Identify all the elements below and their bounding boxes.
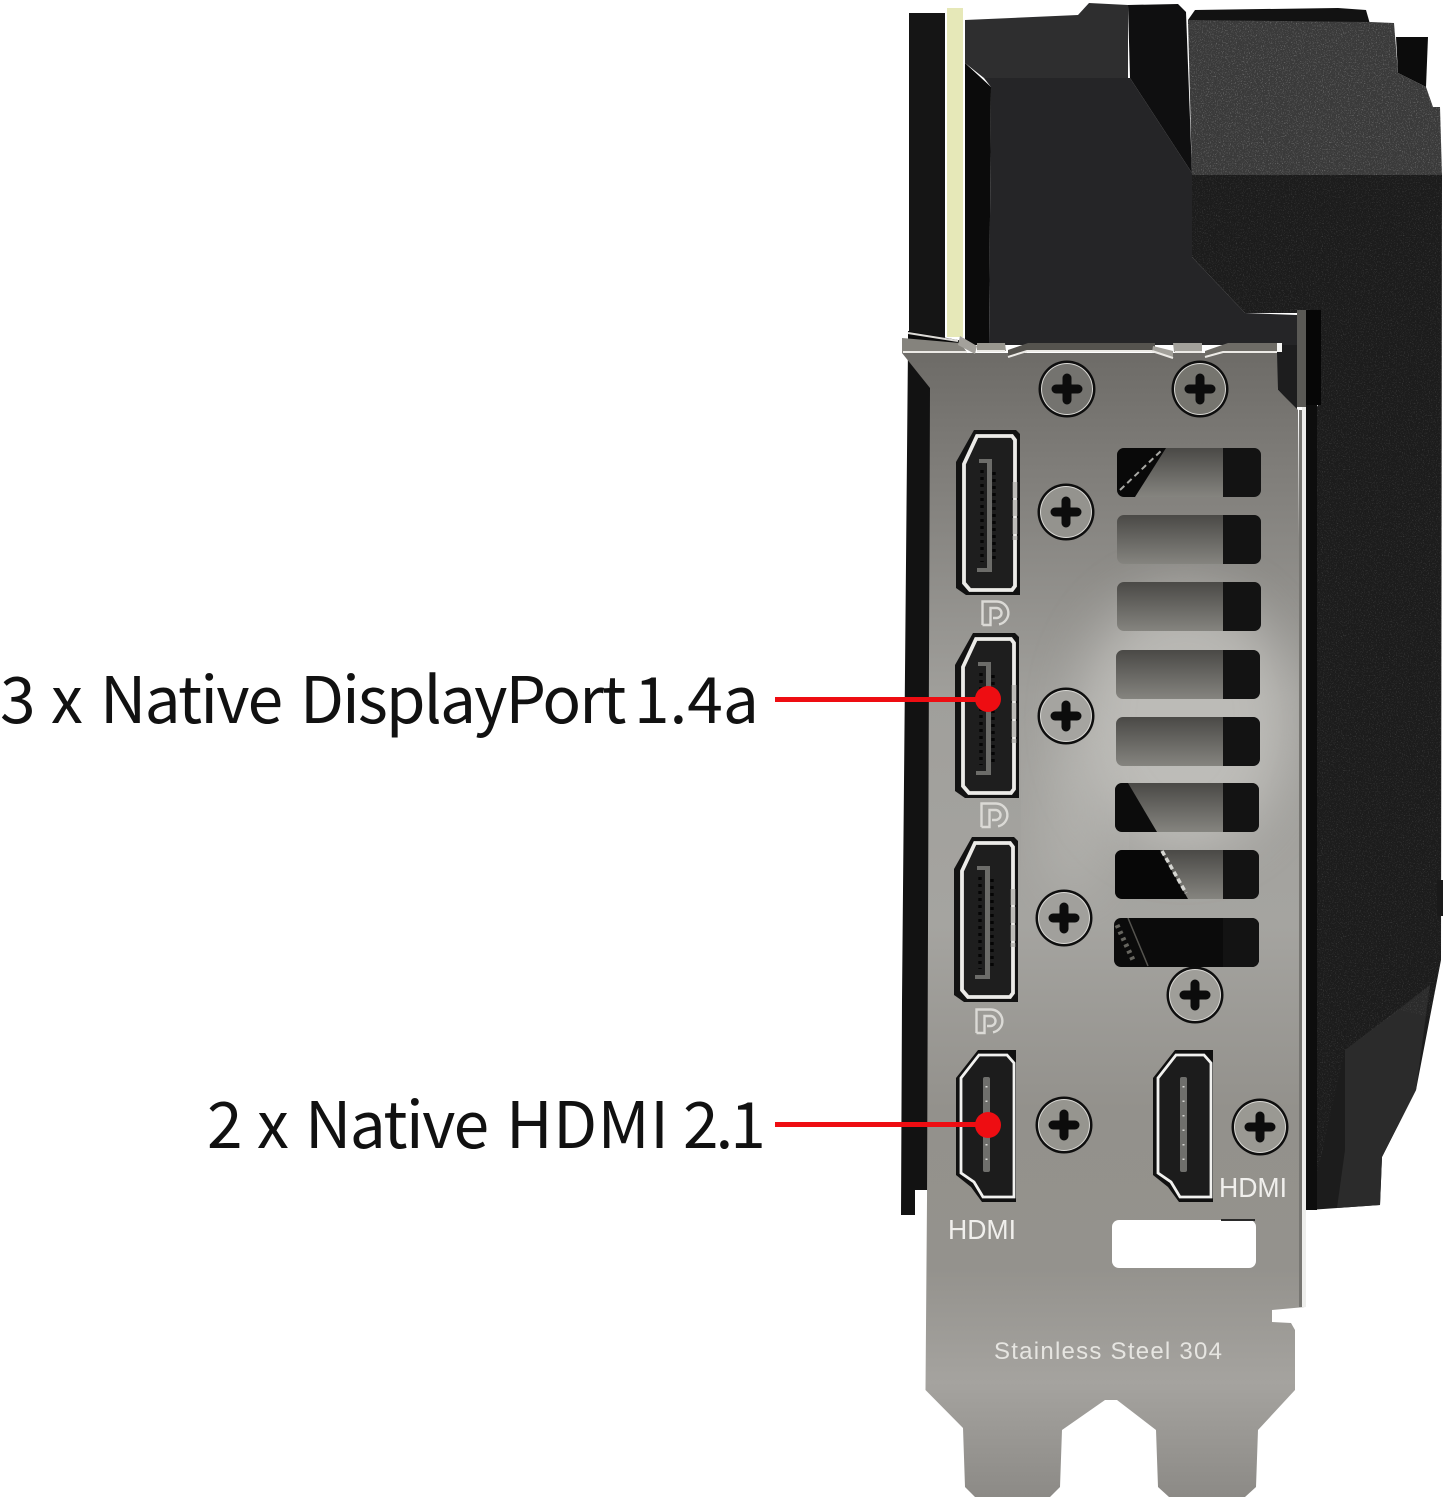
screws: [1036, 360, 1288, 1156]
cooler grain lower: [1192, 175, 1442, 1210]
tab shadow: [1306, 310, 1321, 405]
DisplayPort logos: [976, 602, 1008, 1033]
DisplayPort marker dot: [975, 686, 1001, 712]
cooler inner shadow strip: [1306, 405, 1317, 1210]
HDMI engraved label right: HDMI: [1219, 1172, 1287, 1203]
DisplayPort connectors: [954, 430, 1020, 1002]
callout: DisplayPort: [0, 650, 1001, 742]
shroud upper bevel: [965, 3, 1128, 78]
callout: HDMI: [207, 1075, 1001, 1167]
HDMI label: Native: [305, 1075, 488, 1167]
HDMI leader line: [775, 1122, 980, 1127]
bracket side tab: [1297, 310, 1306, 407]
cutout top edge: [1221, 1219, 1255, 1221]
steel I/O bracket: [902, 333, 1306, 1497]
rear plate clip: [908, 331, 975, 345]
bracket light sheen: [1045, 590, 1290, 900]
HDMI label: 2.1: [683, 1075, 763, 1167]
HDMI label: 2: [207, 1075, 243, 1167]
HDMI label: x: [257, 1075, 289, 1167]
fold highlight strip: [1302, 407, 1306, 1307]
lower cooler facet: [1337, 985, 1430, 1208]
DisplayPort label: 3: [0, 650, 36, 742]
bracket lower cutout: [1112, 1220, 1256, 1268]
HDMI engraved label left: HDMI: [948, 1214, 1016, 1245]
DisplayPort label: DisplayPort: [300, 650, 626, 742]
DisplayPort label: x: [51, 650, 83, 742]
cooler grain: [1188, 20, 1442, 175]
DisplayPort label: Native: [100, 650, 281, 742]
side button: [1437, 880, 1443, 916]
bracket top fold: [902, 333, 1282, 358]
bracket right fold: [1299, 410, 1302, 1307]
graphics card body: [901, 3, 1443, 1215]
shroud main face: [984, 78, 1297, 345]
heatsink cap: [1188, 8, 1370, 24]
DisplayPort leader line: [775, 697, 980, 702]
black shroud strip: [965, 63, 991, 345]
shroud dark side face: [1128, 4, 1192, 173]
rear black plate: [909, 13, 945, 345]
textured lower cooler block: [1192, 175, 1442, 1210]
HDMI connectors: [956, 1050, 1213, 1202]
bracket plate: [902, 353, 1305, 1497]
textured upper cooler block: [1188, 20, 1442, 175]
ventilation slots: [1110, 440, 1265, 970]
HDMI label: HDMI: [506, 1075, 669, 1167]
HDMI marker dot: [975, 1112, 1001, 1138]
DisplayPort label: 1.4a: [634, 650, 759, 742]
engraved material label: Stainless Steel 304: [994, 1338, 1222, 1365]
cream PCB edge: [947, 8, 963, 337]
rear dark notch piece: [1396, 37, 1428, 87]
lower left plate: [901, 345, 932, 1215]
housing behind bracket corner: [1270, 345, 1297, 410]
